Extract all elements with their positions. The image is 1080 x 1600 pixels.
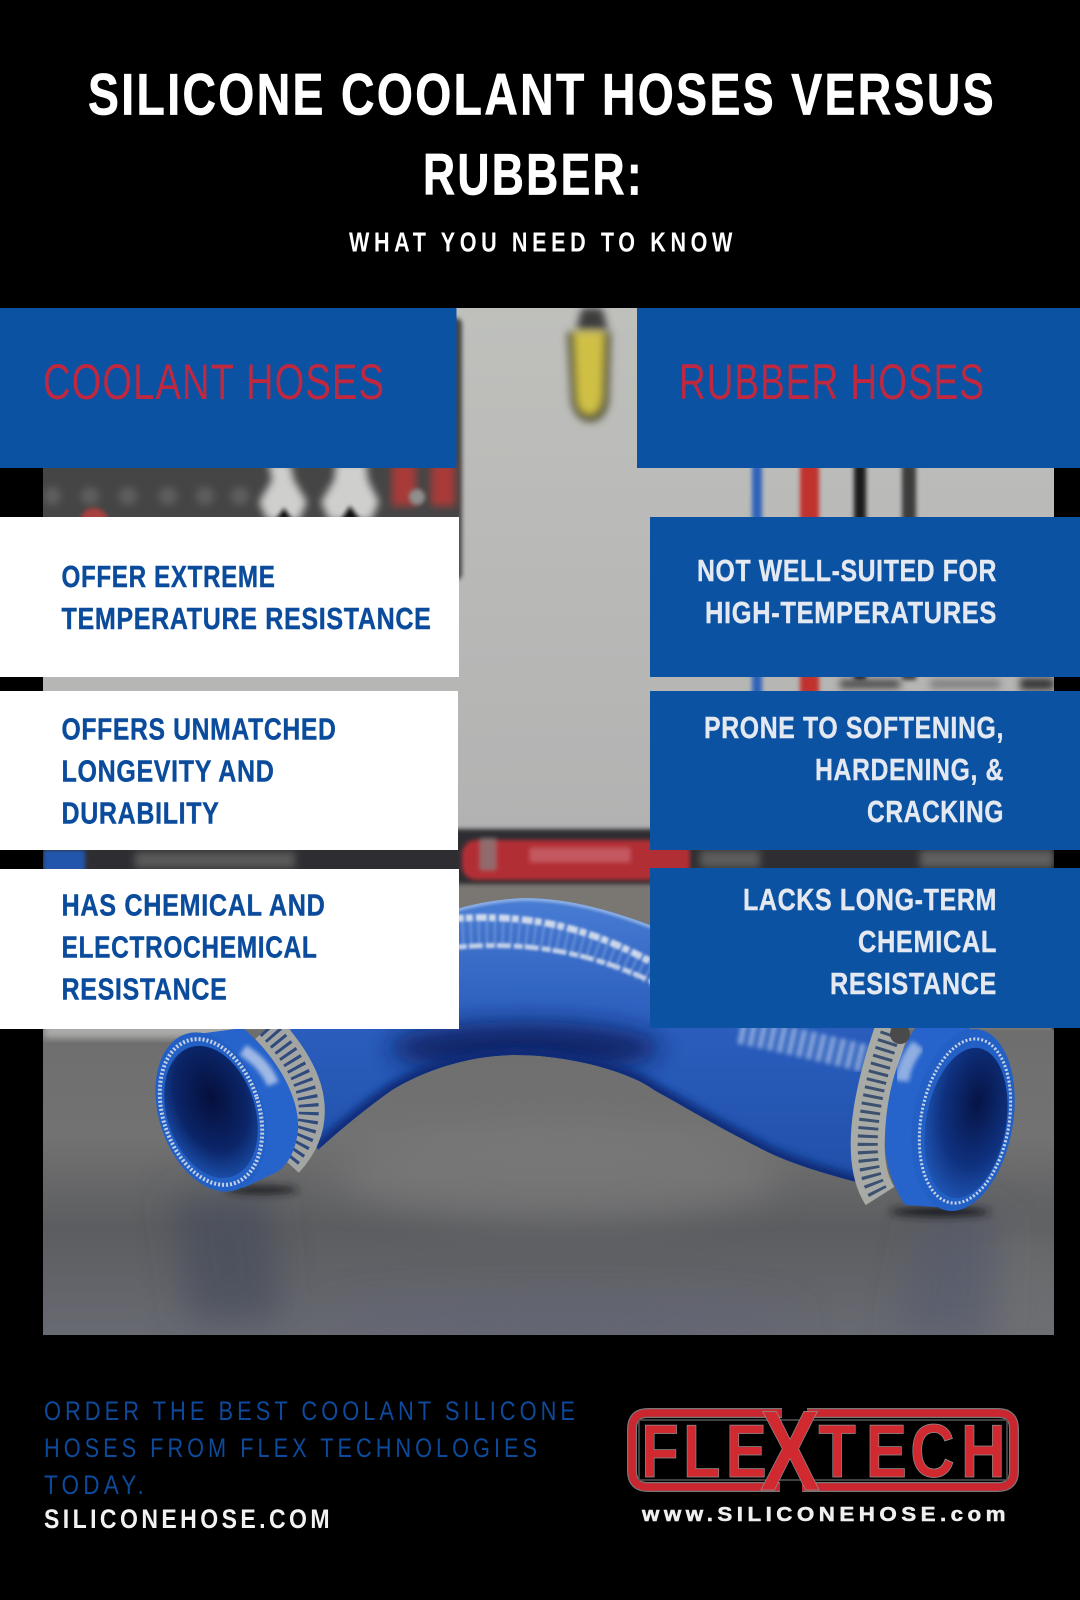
logo: wordmark	[641, 1388, 1005, 1515]
photo: right hose cuff	[884, 1028, 1015, 1211]
panel: rubber point 2: PRONE TO SOFTENING,	[704, 710, 1004, 745]
panel: coolant point 2: OFFERS UNMATCHED	[62, 712, 336, 746]
panel: coolant point 3	[0, 869, 459, 1029]
panel: rubber point 3	[650, 868, 1080, 1028]
panel: rubber point 2	[650, 691, 1080, 850]
panel: rubber point 2: CRACKING	[867, 794, 1004, 829]
photo: yellow tool on wall	[567, 308, 611, 422]
photo: hose reflections	[172, 1195, 1000, 1342]
photo: left hose clamp	[267, 1028, 309, 1162]
panel: coolant point 1: TEMPERATURE RESISTANCE	[62, 601, 432, 636]
logo: Flextech	[632, 1388, 1014, 1526]
logo: url: www.SILICONEHOSE.com	[641, 1504, 1010, 1526]
panel: rubber hoses header	[637, 308, 1080, 468]
panel: coolant hoses header	[0, 308, 456, 468]
panel: coolant point 1: OFFER EXTREME	[62, 559, 276, 594]
photo: right hose clamp	[868, 1024, 910, 1196]
photo: workshop wall	[43, 308, 1054, 838]
logo: frame	[632, 1413, 1014, 1487]
panel: rubber point 2: HARDENING, &	[815, 752, 1004, 787]
photo: coloured hoses hanging on right	[748, 468, 919, 691]
panel: coolant point 2	[0, 691, 458, 850]
panel: rubber point 1	[650, 517, 1080, 677]
photo: tool board on left	[20, 318, 462, 580]
panel: coolant point 3: HAS CHEMICAL AND	[62, 888, 326, 922]
panel: coolant point 3: RESISTANCE	[62, 972, 228, 1006]
panel: coolant point 3: ELECTROCHEMICAL	[62, 930, 318, 964]
photo: left hose cuff	[155, 1029, 298, 1192]
photo: hose body	[285, 898, 885, 1188]
photo: bench surface	[43, 884, 1070, 1360]
title: RUBBER:	[423, 142, 644, 208]
panel: rubber point 1: NOT WELL-SUITED FOR	[697, 553, 997, 588]
subtitle: WHAT YOU NEED TO KNOW	[349, 226, 737, 258]
logo: wordmark: X	[760, 1388, 820, 1515]
panel: coolant point 2: LONGEVITY AND	[62, 754, 274, 788]
call to action text: TODAY.	[44, 1470, 148, 1500]
panel: rubber point 3: CHEMICAL	[858, 924, 997, 959]
title	[88, 62, 996, 208]
photo: contact shadows	[226, 1186, 990, 1217]
panel: coolant point 1	[0, 517, 459, 677]
call to action text	[44, 1396, 579, 1534]
call to action text: HOSES FROM FLEX TECHNOLOGIES	[44, 1433, 541, 1463]
website link: SILICONEHOSE.COM	[44, 1504, 333, 1534]
heading: coolant hoses: COOLANT HOSES	[43, 354, 385, 410]
call to action text: ORDER THE BEST COOLANT SILICONE	[44, 1396, 579, 1426]
panel: rubber point 3: RESISTANCE	[830, 966, 997, 1001]
photo: blue silicone hose on workbench	[20, 308, 1070, 1360]
panel: coolant point 2: DURABILITY	[62, 796, 220, 830]
panel: rubber point 1: HIGH-TEMPERATURES	[705, 595, 997, 630]
logo: wordmark: TECH	[818, 1409, 1005, 1493]
logo: wordmark: FLE	[641, 1409, 767, 1493]
photo: dark workbench band	[43, 829, 1054, 889]
panel: rubber point 3: LACKS LONG-TERM	[743, 882, 997, 917]
photo: red tube on bench	[462, 838, 690, 880]
